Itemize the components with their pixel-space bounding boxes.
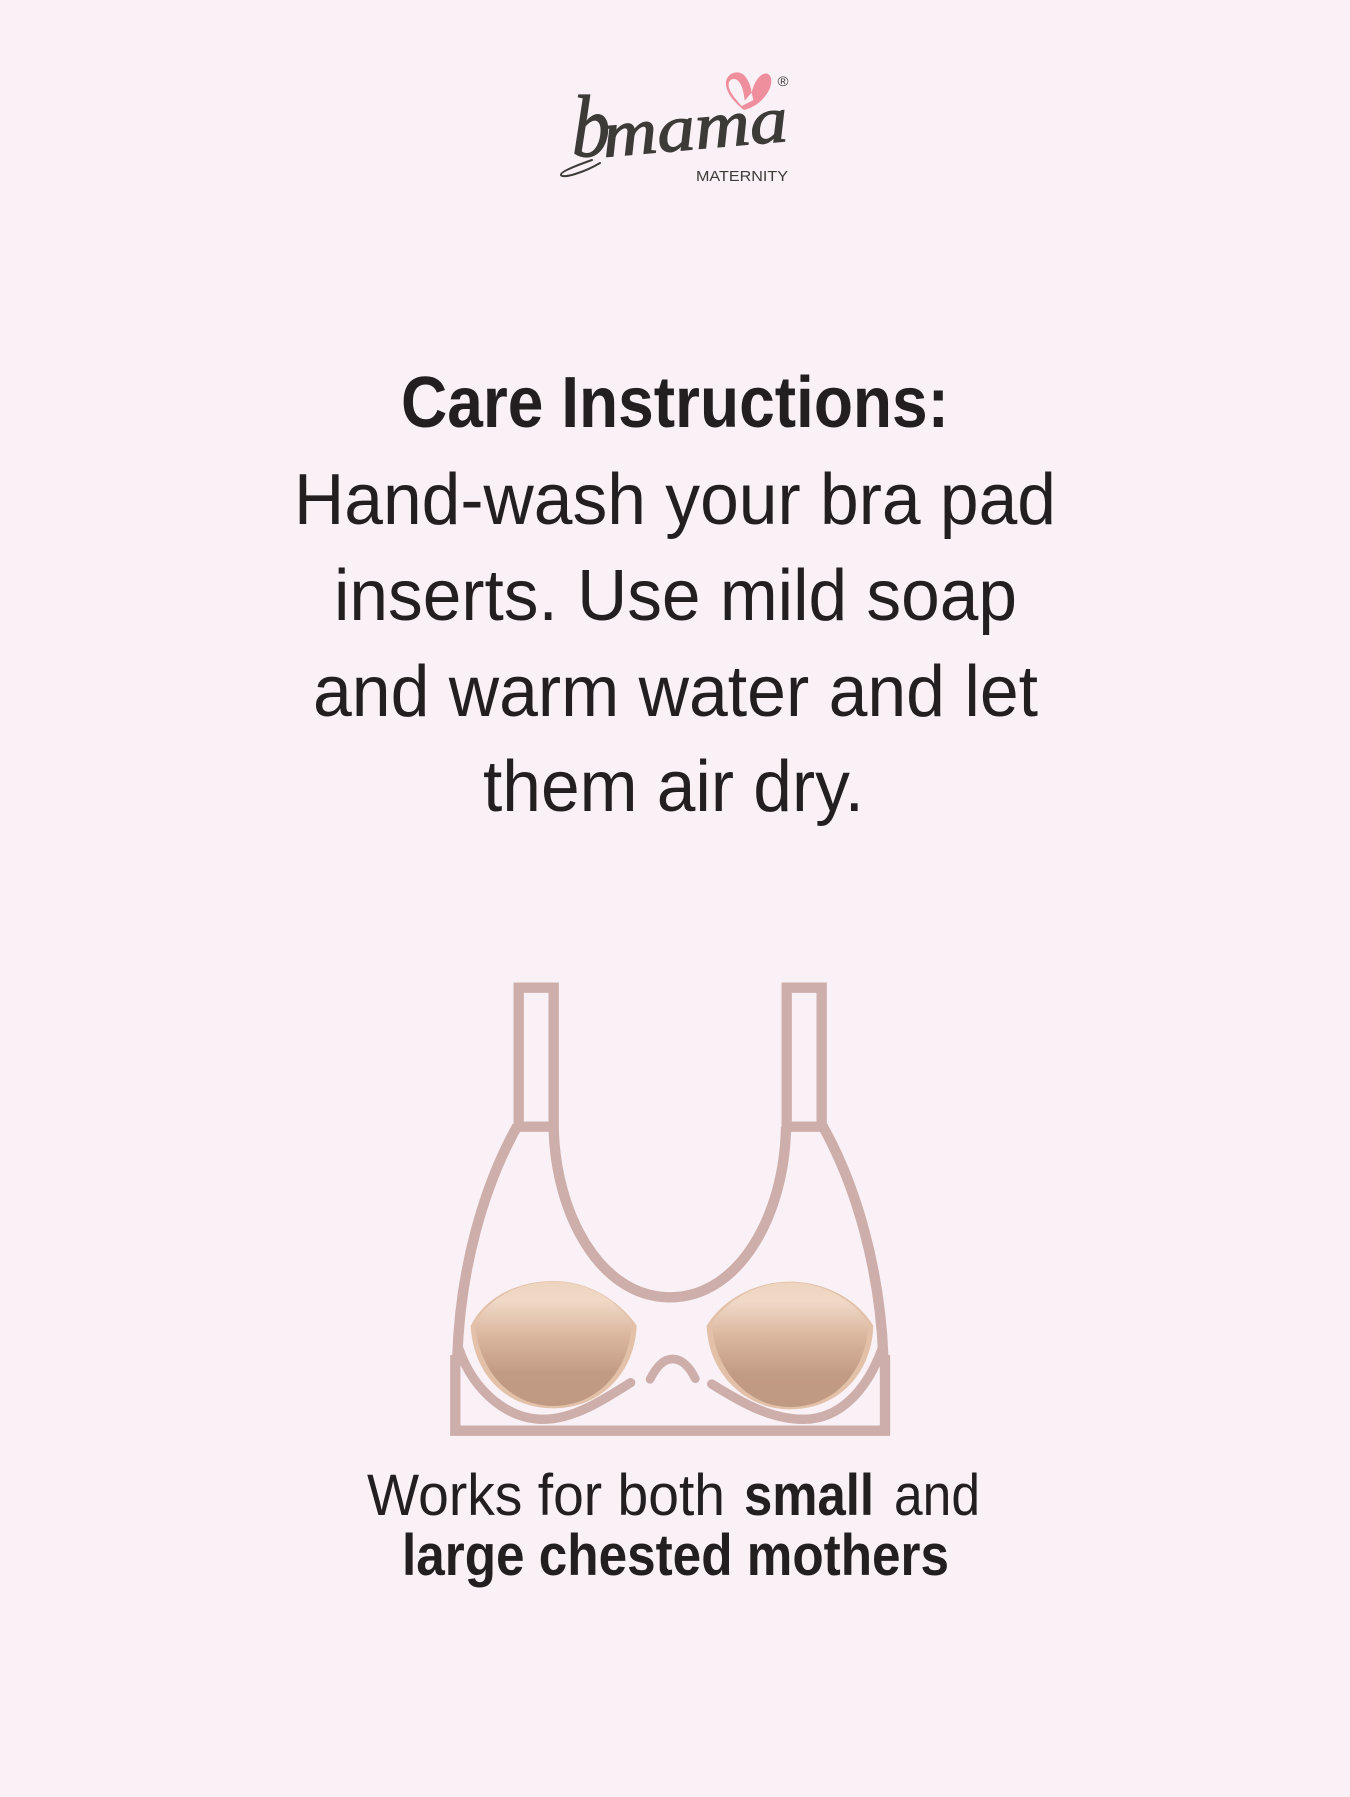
logo letters mama: mama xyxy=(599,83,791,172)
bottom band xyxy=(455,1355,885,1431)
icon: left pad insert xyxy=(471,1281,637,1408)
right strap xyxy=(787,988,822,1127)
right underwire xyxy=(712,1350,882,1419)
text block: care directions: Hand-wash your bra pad xyxy=(294,460,1056,540)
neckline xyxy=(554,1127,786,1297)
icon: bra outline xyxy=(455,988,885,1431)
right side seam xyxy=(823,1126,883,1357)
caption: large chested mothers xyxy=(402,1523,949,1588)
text block: care directions xyxy=(294,460,1056,827)
left side seam xyxy=(457,1126,517,1357)
registered mark: ® xyxy=(778,73,789,89)
logo subtitle: MATERNITY xyxy=(696,169,788,185)
left strap xyxy=(519,988,554,1127)
text block: care directions: and warm water and let xyxy=(313,652,1038,732)
text block: care directions: inserts. Use mild soap xyxy=(334,556,1017,636)
logo letter b: b xyxy=(572,79,610,176)
icon: right pad insert xyxy=(707,1282,873,1409)
centre gore xyxy=(650,1359,695,1379)
caption xyxy=(367,1463,980,1588)
logo swash xyxy=(561,160,600,176)
text block: care directions: them air dry. xyxy=(483,747,864,827)
heading: care instructions: Care Instructions: xyxy=(401,363,949,443)
caption: small xyxy=(744,1463,874,1528)
illustration: bra with pad inserts xyxy=(455,988,885,1431)
caption: and xyxy=(894,1463,980,1528)
logo: bmama maternity xyxy=(561,72,791,185)
icon: heart xyxy=(726,72,771,110)
left underwire xyxy=(459,1350,631,1419)
caption: Works for both xyxy=(367,1463,725,1528)
